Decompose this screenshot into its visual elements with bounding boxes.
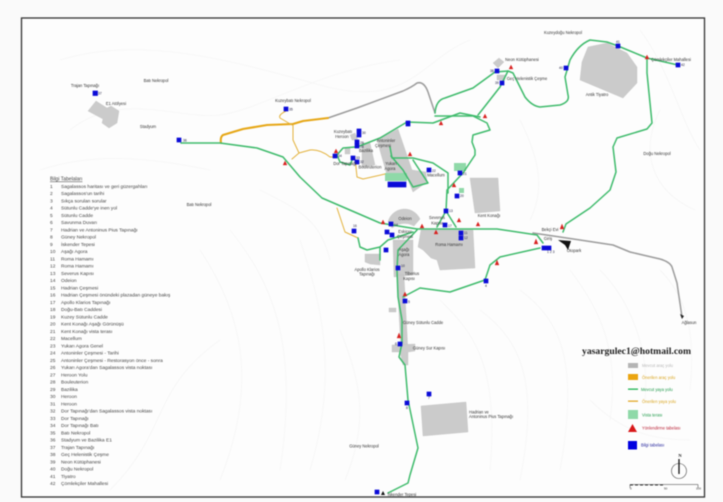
legend: Önerilen araç yolu	[642, 375, 675, 380]
information sign list: Bilgi Tabelaları	[50, 176, 82, 182]
information sign list: Sıkça sorulan sorular	[61, 198, 107, 204]
information sign list: 15	[50, 286, 56, 292]
information sign list: 5	[50, 213, 53, 219]
map place labels: Doğu Nekropol	[643, 151, 671, 156]
map place labels: Ağlasun	[682, 320, 697, 325]
information sign list: Odeion	[61, 278, 77, 284]
information sign list: 18	[50, 307, 56, 313]
sign numbers: 21	[463, 172, 467, 176]
legend: Mevcut yaya yolu	[641, 387, 673, 392]
information signs	[93, 44, 680, 494]
map place labels: Batı Nekropol	[187, 202, 211, 207]
legend	[628, 363, 680, 450]
map place labels: Kuzeydoğu Nekropol	[544, 30, 582, 35]
sign numbers: 20	[460, 194, 464, 198]
map place labels: Bazilika	[359, 148, 374, 153]
information sign list: 27	[50, 372, 56, 378]
map place labels: Bouleuterion	[358, 164, 382, 170]
map place labels: Batı Nekropol	[144, 78, 168, 83]
map place labels: Odeion	[398, 216, 412, 221]
information sign list: Roma Hamamı	[61, 256, 94, 262]
map place labels: Güney Sütunlu Cadde	[403, 320, 444, 325]
information sign list: 2	[50, 191, 53, 197]
information sign list: Yukarı Agora Genel	[61, 344, 103, 350]
direction signs	[283, 55, 649, 338]
information sign list: İskender Tepesi	[61, 241, 95, 248]
information sign list: 23	[50, 344, 56, 350]
map place labels: Antoninler	[377, 138, 396, 143]
sign numbers: 14	[394, 223, 398, 227]
map place labels: Tapınağı	[359, 272, 375, 276]
icon: parking arrow	[558, 240, 571, 250]
legend: Mevcut araç yolu	[642, 363, 673, 368]
map place labels: Kapısı	[403, 276, 415, 281]
information sign list: 10	[50, 249, 56, 255]
map place labels: Bekçi Evi	[542, 227, 559, 232]
buildings	[88, 43, 637, 436]
map place labels: Aşağı	[399, 247, 409, 252]
information sign list: 12	[50, 264, 56, 270]
sign numbers: 4	[485, 284, 487, 288]
information sign list: 3	[50, 198, 53, 204]
information sign list: Kent Konağı Aşağı Görünüşü	[61, 322, 124, 328]
map place labels: Apollo Klarios	[354, 267, 380, 272]
icon: İskender Tepesi marker	[381, 491, 385, 495]
information sign list: Bazilika	[61, 387, 78, 393]
map place labels: Stadyum	[140, 124, 157, 129]
information sign list: Sütunlu Cadde	[61, 213, 93, 219]
information sign list: 8	[50, 235, 53, 241]
information sign list: 16	[50, 293, 56, 299]
information sign list: 30	[50, 394, 56, 400]
information sign list: Tiyatro	[61, 474, 76, 480]
map place labels: Neon Kütüphanesi	[505, 57, 539, 62]
sign numbers: 35	[289, 108, 293, 112]
information sign list: 11	[50, 256, 55, 262]
icon: road end arrow	[680, 314, 684, 319]
map place labels: Antik Tiyatro	[586, 92, 609, 97]
sign numbers: 1 2 3	[547, 250, 555, 254]
map place labels: Geç Helenistik Çeşme	[507, 76, 548, 81]
north arrow	[672, 453, 686, 478]
information sign list: Severus Kapısı	[61, 271, 94, 277]
information sign list: Batı Nekropol	[61, 430, 90, 436]
information sign list: 40	[50, 467, 56, 473]
information sign list: 13	[50, 271, 56, 277]
information sign list: 7	[50, 228, 53, 234]
information sign list: 20	[50, 322, 56, 328]
map place labels: Çeşmesi	[375, 143, 391, 148]
information sign list: 26	[50, 365, 56, 371]
information sign list: 33	[50, 416, 56, 422]
information sign list: Geç Helenistik Çeşme	[61, 452, 109, 458]
information sign list: 37	[50, 445, 56, 451]
map place labels: Yukarı	[385, 161, 397, 166]
north arrow: N	[678, 453, 682, 458]
information sign list: 41	[50, 474, 56, 480]
information sign list: 1	[50, 184, 53, 190]
sign numbers: 8	[406, 406, 408, 410]
information sign list: Stadyum ve Bazilika E1	[61, 438, 112, 444]
sign numbers: 39	[495, 81, 499, 85]
information sign list: 14	[50, 278, 56, 284]
information sign list: Dor Tapınağı	[61, 416, 89, 422]
information sign list: 35	[50, 430, 56, 436]
map place labels: Hadrian ve	[469, 410, 490, 414]
information sign list: Çömlekçiler Mahallesi	[61, 481, 108, 487]
scale bar: 100	[696, 486, 701, 490]
map place labels: İskender Tepesi	[388, 492, 416, 497]
information sign list: Heroon Yolu	[61, 372, 88, 378]
map place labels: Agora	[399, 252, 410, 257]
sign numbers: 29	[360, 141, 364, 145]
information sign list: Sütunlu Cadde'ye inen yol	[61, 206, 117, 212]
proposed pedestrian paths	[280, 111, 385, 238]
sign numbers: 33	[356, 156, 360, 160]
information sign list: 25	[50, 358, 56, 364]
information sign list: Antoninler Çeşmesi - Restorasyon önce - sonra	[61, 358, 163, 364]
map place labels: Tiberius	[405, 271, 419, 276]
map place labels: Kuzeybatı Nekropol	[275, 98, 311, 103]
information sign list: Sagalassos haritası ve geri güzergahları	[61, 184, 147, 190]
map place labels: Macellum	[427, 172, 445, 178]
information sign list: 32	[50, 409, 56, 415]
map place labels: Agora	[385, 166, 396, 171]
sign numbers: 41	[616, 40, 620, 44]
map place labels: Sevenus	[429, 215, 445, 220]
sign numbers: 42	[681, 63, 685, 67]
information sign list: Aşağı Agora	[61, 249, 88, 255]
information sign list: Antoninler Çeşmesi - Tarihi	[61, 351, 119, 357]
information sign list: Dor Tapınağı Batı	[61, 423, 99, 429]
scale bar	[630, 484, 701, 490]
map place labels: Güney Sur Kapısı	[413, 346, 445, 350]
sign numbers: 30	[362, 131, 366, 135]
map place labels: Trajan Tapınağı	[71, 83, 99, 88]
sign numbers: 16	[353, 224, 357, 228]
map place labels: Kent Konağı	[478, 213, 500, 218]
sign numbers: 37	[98, 92, 102, 96]
information sign list: 34	[50, 423, 56, 429]
scale bar: 50	[664, 486, 668, 490]
map place labels: Antoninus Pius Tapınağı	[469, 414, 513, 419]
information sign list: Heroon	[61, 402, 77, 408]
scale bar: 0	[630, 486, 632, 490]
sign numbers: 34	[338, 154, 342, 158]
information sign list: Kent Konağı vista terası	[61, 329, 112, 335]
information sign list: Sagalassos'un tarihi	[61, 191, 104, 197]
sign numbers: 7	[428, 396, 430, 400]
map place labels: Kapısı	[431, 220, 443, 226]
sign numbers: 36	[183, 138, 187, 142]
information sign list: Güney Nekropol	[61, 235, 96, 241]
information sign list: Roma Hamamı	[61, 264, 94, 270]
information sign list: Apollo Klarios Tapınağı	[61, 300, 110, 306]
information sign list: 31	[50, 402, 56, 408]
map place labels: E1 Atölyesi	[106, 101, 126, 106]
map place labels: Heroon	[335, 134, 349, 139]
information sign list	[50, 176, 171, 487]
legend: Yönlendirme tabelası	[642, 426, 680, 430]
information sign list: 28	[50, 380, 56, 386]
map place labels: Eskiçer	[398, 229, 412, 234]
vista terraces	[385, 163, 466, 193]
sign numbers	[98, 40, 685, 410]
map place labels: Güney Nekropol	[349, 444, 379, 448]
map place labels: Kuzeybatı	[334, 129, 352, 134]
sign numbers: 40	[559, 66, 563, 70]
map place labels: Roma Hamamı	[435, 242, 463, 247]
email address: yasargulec1@hotmail.com	[582, 347, 691, 357]
legend: Önerilen yaya yolu	[642, 399, 676, 404]
information sign list: Neon Kütüphanesi	[61, 460, 101, 466]
information sign list: Dor Tapınağı'dan Sagalassos vista noktası	[61, 409, 152, 415]
information sign list: Doğu Nekropol	[61, 467, 93, 473]
map place labels: Çömlekçiler Mahallesi	[651, 57, 691, 62]
information sign list: 19	[50, 314, 56, 320]
legend: Bilgi tabelası	[641, 442, 664, 448]
map place labels: Giriş	[544, 236, 552, 241]
sign numbers: 6	[395, 342, 397, 346]
existing pedestrian paths	[181, 40, 678, 493]
information sign list: Hadrian Çeşmesi önündeki plazadan güneye bakış	[61, 293, 171, 299]
legend: Vista terası	[642, 412, 662, 418]
proposed vehicle road	[221, 118, 328, 143]
information sign list: Hadrian ve Antoninus Pius Tapınağı	[61, 228, 138, 234]
information sign list: 6	[50, 220, 53, 226]
map place labels: Çeşmesi	[397, 234, 413, 239]
information sign list: 39	[50, 460, 56, 466]
information sign list: 21	[50, 329, 56, 335]
information sign list: Doğu-Batı Caddesi	[61, 307, 102, 313]
information sign list: 29	[50, 387, 56, 393]
sign numbers: 17	[448, 224, 452, 228]
information sign list: Heroon	[61, 394, 77, 400]
information sign list: Savunma Duvarı	[61, 220, 97, 226]
information sign list: 17	[50, 300, 56, 306]
information sign list: Kuzey Sütunlu Cadde	[61, 314, 108, 320]
sign numbers: 22	[432, 169, 436, 173]
information sign list: 38	[50, 452, 56, 458]
map place labels: Dor Tapınağı	[333, 161, 357, 166]
information sign list: 9	[50, 242, 53, 248]
sign numbers: 11	[464, 231, 468, 235]
information sign list: 22	[50, 336, 56, 342]
information sign list: Trajan Tapınağı	[61, 445, 94, 451]
information sign list: Yukarı Agora'dan Sagalassos vista noktası	[61, 365, 152, 371]
information sign list: 36	[50, 438, 56, 444]
sign numbers: 10	[401, 264, 405, 268]
information sign list: 4	[50, 206, 53, 212]
sign numbers: 5	[408, 300, 410, 304]
information sign list: 24	[50, 351, 56, 357]
sign numbers: 12	[464, 236, 468, 240]
sign numbers: 13	[449, 209, 453, 213]
information sign list: Hadrian Çeşmesi	[61, 286, 98, 292]
information sign list: Macellum	[61, 336, 82, 342]
sign numbers: 28	[360, 145, 364, 149]
information sign list: 42	[50, 481, 56, 487]
map place labels: Otopark	[567, 248, 582, 253]
sign numbers: 38	[490, 69, 494, 73]
existing vehicle road	[328, 83, 682, 317]
sign numbers: 32	[360, 160, 364, 164]
information sign list: Bouleuterion	[61, 380, 89, 386]
